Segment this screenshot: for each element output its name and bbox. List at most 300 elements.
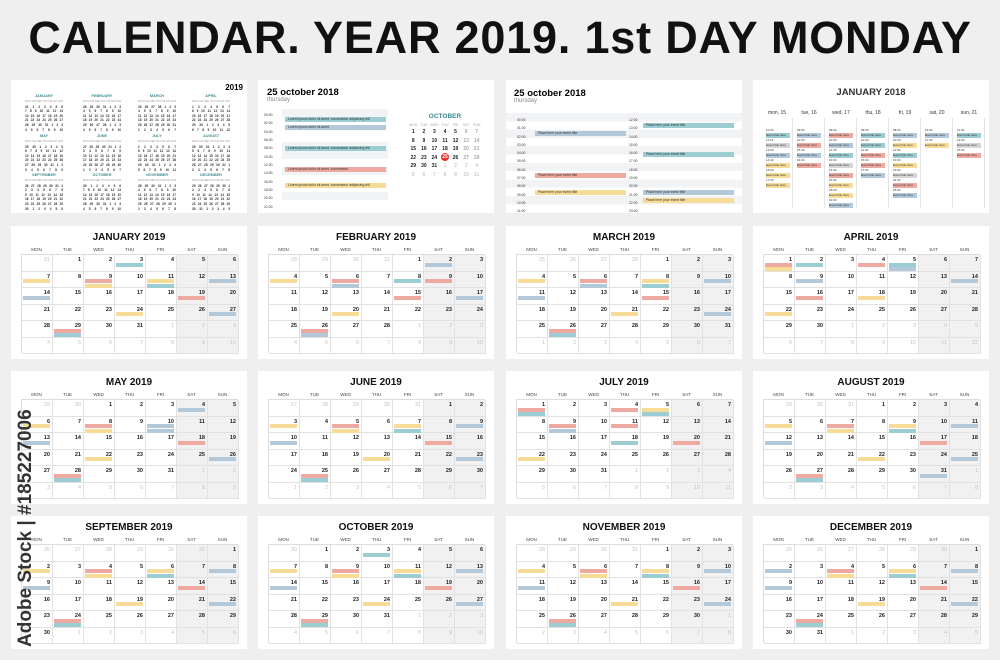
panel: june 2019: 31 [415, 402, 421, 408]
panel: december 2019: 16 [786, 596, 792, 602]
panel: may 2019: THU [125, 392, 134, 397]
panel: may 2019: 1 [202, 468, 205, 474]
panel: november 2019: 28 [632, 613, 638, 619]
panel: june 2019: 12 [353, 435, 359, 441]
panel: november 2019: 6 [666, 630, 669, 636]
panel: october 2019: SUN [465, 537, 474, 542]
mini month: october: 3 [433, 129, 436, 135]
panel: january 2019: 8 [78, 274, 81, 280]
panel: may 2019: SUN [218, 392, 227, 397]
mini: january: 31 1 2 3 4 5 6 [25, 105, 63, 109]
panel: september 2019: FRI [157, 537, 164, 542]
panel: may 2019: 20 [44, 452, 50, 458]
panel: june 2019: FRI [404, 392, 411, 397]
panel: december 2019: SAT [929, 537, 938, 542]
panel: october 2019: 20 [477, 580, 483, 586]
mini month: october: 2 [422, 129, 425, 135]
panel: september 2019: 5 [202, 630, 205, 636]
panel: may 2019: 14 [75, 435, 81, 441]
panel: may 2019: 11 [199, 418, 205, 424]
mini month: october: 30 [421, 163, 427, 169]
panel: june 2019: 26 [353, 468, 359, 474]
schedule list: 08:00 [264, 146, 272, 150]
mini: may: 20 21 22 23 24 25 26 [25, 158, 63, 162]
panel: november 2019: 31 [632, 547, 638, 553]
panel: january 2019: 2 [202, 323, 205, 329]
panel: august 2019: 29 [879, 468, 885, 474]
panel: october 2019: 26 [446, 596, 452, 602]
panel: august 2019: 3 [944, 402, 947, 408]
panel: september 2019: 2 [109, 630, 112, 636]
panel: september 2019: 30 [168, 547, 174, 553]
panel: february 2019: 11 [291, 290, 297, 296]
mini: june: MON TUE WED THU FRI SAT SUN [83, 140, 121, 143]
panel: november 2019: 9 [697, 564, 700, 570]
panel: september 2019: 30 [44, 630, 50, 636]
mini: march: 11 12 13 14 15 16 17 [138, 114, 176, 118]
mini: april: 22 23 24 25 26 27 28 [192, 118, 230, 122]
panel: september 2019: 26 [44, 547, 50, 553]
panel: january 2019: 7 [47, 274, 50, 280]
mini month: october: 15 [410, 146, 416, 152]
schedule grid: 01:00 [517, 126, 526, 130]
panel: january 2019: SUN [218, 247, 227, 252]
mini: august: 29 30 31 1 2 3 4 [192, 145, 230, 149]
panel: october 2019: THU [372, 537, 381, 542]
panel: may 2019: 30 [75, 402, 81, 408]
panel: may 2019: SAT [187, 392, 196, 397]
panel: november 2019: 10 [725, 564, 731, 570]
panel: october 2019: 9 [356, 564, 359, 570]
panel: march 2019: 3 [728, 257, 731, 263]
panel: march 2019: 26 [570, 257, 576, 263]
panel: february 2019: THU [372, 247, 381, 252]
panel: february 2019: 7 [387, 274, 390, 280]
panel: january 2019: FRI [157, 247, 164, 252]
panel: january 2019: 31 [137, 323, 143, 329]
panel: march 2019: 21 [632, 306, 638, 312]
panel: may 2019: 3 [171, 402, 174, 408]
panel: october 2019: 24 [384, 596, 390, 602]
panel: january 2019: 1 [78, 257, 81, 263]
panel: june 2019: 2 [325, 484, 328, 490]
panel: july 2019: 28 [725, 452, 731, 458]
panel: april 2019: 22 [786, 306, 792, 312]
panel: february 2019: 21 [384, 306, 390, 312]
panel: december 2019: 23 [786, 613, 792, 619]
mini: may: MAY [40, 134, 48, 138]
panel: august 2019: 23 [910, 452, 916, 458]
panel: may 2019: 17 [168, 435, 174, 441]
mini: february: 11 12 13 14 15 16 17 [83, 114, 121, 118]
panel: september 2019: 22 [230, 596, 236, 602]
mini: june: 17 18 19 20 21 22 23 [83, 158, 121, 162]
mini: december: DECEMBER [200, 173, 222, 177]
schedule list: Lorem ipsum dolor sit amet [288, 125, 329, 129]
panel: september 2019: 11 [106, 580, 112, 586]
panel: august 2019: 10 [941, 418, 947, 424]
panel: august 2019: 6 [913, 484, 916, 490]
panel: april 2019: 9 [820, 274, 823, 280]
panel: may 2019: 8 [109, 418, 112, 424]
panel: february 2019: 24 [477, 306, 483, 312]
mini month: october: 11 [442, 138, 448, 144]
panel: august 2019: 1 [882, 402, 885, 408]
panel: may 2019: 25 [199, 452, 205, 458]
panel: september 2019: 17 [75, 596, 81, 602]
week columns with events [761, 118, 985, 208]
schedule grid: 22:00 [629, 201, 638, 205]
panel: june 2019: SAT [434, 392, 443, 397]
panel: march 2019: 1 [666, 257, 669, 263]
week columns with events: Event title here [893, 193, 913, 197]
schedule list: Lorem ipsum dolor sit amet, consectetur adipiscing elit [288, 183, 370, 187]
panel: november 2019: 5 [573, 564, 576, 570]
panel: may 2019: 9 [140, 418, 143, 424]
week columns with events: Event title here [766, 183, 786, 187]
panel: november 2019: 1 [728, 613, 731, 619]
panel: august 2019: SAT [929, 392, 938, 397]
panel: july 2019: 23 [570, 452, 576, 458]
panel: february 2019: TUE [310, 247, 319, 252]
panel: april 2019: FRI [899, 247, 906, 252]
panel: august 2019: 22 [879, 452, 885, 458]
panel: august 2019: 19 [786, 452, 792, 458]
panel: february 2019: 27 [353, 323, 359, 329]
mini: october: 4 5 6 7 8 9 10 [83, 207, 121, 211]
panel: april 2019: 15 [786, 290, 792, 296]
panel: november 2019: 26 [570, 613, 576, 619]
panel: march 2019: 13 [601, 290, 607, 296]
mini month: october: SAT [463, 123, 469, 127]
panel: february 2019: 13 [353, 290, 359, 296]
mini: january [25, 94, 63, 132]
panel: october 2019: 29 [322, 613, 328, 619]
panel: june 2019 [258, 371, 494, 504]
mini: october: 14 15 16 17 18 19 20 [83, 193, 121, 197]
panel: july 2019: 19 [663, 435, 669, 441]
mini: october [83, 173, 121, 211]
week columns with events: Event title here [861, 143, 881, 147]
schedule grid: 16:00 [629, 151, 638, 155]
panel: april 2019: 7 [975, 257, 978, 263]
panel: april 2019: 4 [882, 257, 885, 263]
panel: june 2019: 7 [418, 418, 421, 424]
panel: october 2019: 30 [353, 613, 359, 619]
schedule grid: 08:00 [517, 184, 526, 188]
week columns with events: Event title here [797, 143, 817, 147]
panel: february 2019: 4 [294, 274, 297, 280]
panel: april 2019: 10 [848, 274, 854, 280]
panel: february 2019: 26 [322, 323, 328, 329]
panel: november 2019: 14 [632, 580, 638, 586]
panel: june 2019: 1 [294, 484, 297, 490]
panel: january 2019: 8 [171, 340, 174, 346]
panel: july 2019: 20 [694, 435, 700, 441]
week columns with events: Event title here [766, 173, 786, 177]
panel: april 2019: 3 [913, 323, 916, 329]
heading: 25 october 2018 [267, 87, 339, 98]
mini: november: 28 29 30 31 1 2 3 [138, 184, 176, 188]
panel: september 2019: 16 [44, 596, 50, 602]
panel: june 2019: 1 [449, 402, 452, 408]
panel: november 2019: THU [620, 537, 629, 542]
panel: april 2019: 11 [879, 274, 885, 280]
mini: october: 28 29 30 31 1 2 3 [83, 202, 121, 206]
mini: december: 9 10 11 12 13 14 15 [192, 193, 230, 197]
panel: october 2019: 31 [384, 613, 390, 619]
panel: february 2019: FRI [404, 247, 411, 252]
panel: july 2019: 24 [601, 452, 607, 458]
panel: august 2019: 20 [817, 452, 823, 458]
panel: february 2019: 9 [449, 340, 452, 346]
mini: september: SEPTEMBER [32, 173, 56, 177]
schedule list: 10:00 [264, 155, 272, 159]
schedule grid: 03:00 [517, 143, 526, 147]
panel: april 2019: 26 [910, 306, 916, 312]
mini month: october: 7 [475, 129, 478, 135]
panel: july 2019: JULY 2019 [599, 377, 649, 388]
week columns with events: Event title here [893, 163, 913, 167]
panel: october 2019: 17 [384, 580, 390, 586]
panel: march 2019: 28 [632, 257, 638, 263]
panel: june 2019: 5 [418, 484, 421, 490]
panel: march 2019: 27 [601, 323, 607, 329]
panel: june 2019: 21 [415, 452, 421, 458]
week day headers: thu, 18 [865, 110, 881, 116]
week day headers: fri, 19 [899, 110, 911, 116]
mini: october: 7 8 9 10 11 12 13 [83, 188, 121, 192]
panel: november 2019: 12 [570, 580, 576, 586]
panel: october 2019: 2 [449, 613, 452, 619]
panel: december 2019: 7 [944, 564, 947, 570]
panel: june 2019: 30 [477, 468, 483, 474]
panel: october 2019: 7 [387, 630, 390, 636]
panel: september 2019: 1 [78, 630, 81, 636]
panel: april 2019: 25 [879, 306, 885, 312]
panel: january 2019: 24 [137, 306, 143, 312]
panel: august 2019: 21 [848, 452, 854, 458]
panel: april 2019: 1 [851, 323, 854, 329]
panel: december 2019: 9 [789, 580, 792, 586]
panel: april 2019: 5 [913, 257, 916, 263]
panel: april 2019: SAT [929, 247, 938, 252]
schedule list [264, 109, 388, 209]
panel: august 2019: 4 [851, 484, 854, 490]
panel: april 2019: 28 [972, 306, 978, 312]
panel: july 2019: 1 [635, 468, 638, 474]
mini month: october: 1 [412, 129, 415, 135]
panel: daily planner 24h [506, 80, 742, 213]
panel: july 2019: 5 [666, 402, 669, 408]
panel: november 2019: 23 [694, 596, 700, 602]
panel: march 2019: 11 [539, 290, 545, 296]
mini: april: 8 9 10 11 12 13 14 [192, 109, 230, 113]
panel: may 2019: 4 [78, 484, 81, 490]
heading: JANUARY 2018 [836, 87, 906, 98]
panel: october 2019: 10 [384, 564, 390, 570]
panel: may 2019: 8 [202, 484, 205, 490]
panel: july 2019: 7 [728, 402, 731, 408]
panel: march 2019: 7 [635, 274, 638, 280]
panel: august 2019: 27 [817, 468, 823, 474]
week columns with events: Event title here [829, 173, 849, 177]
panel: february 2019: 3 [480, 323, 483, 329]
week columns with events: Event title here [797, 163, 817, 167]
panel: december 2019: SUN [960, 537, 969, 542]
mini month: october: 10 [432, 138, 437, 144]
panel: april 2019: 9 [882, 340, 885, 346]
panel: may 2019: 31 [168, 468, 174, 474]
panel: november 2019: 2 [542, 630, 545, 636]
mini: december: 2 3 4 5 6 7 8 [192, 188, 230, 192]
mini: june: 27 28 29 30 31 1 2 [83, 145, 121, 149]
panel: september 2019: 12 [137, 580, 143, 586]
panel: may 2019: 2 [233, 468, 236, 474]
mini: may: 27 28 29 30 31 1 2 [25, 163, 63, 167]
panel: march 2019: 19 [570, 306, 576, 312]
panel: june 2019: 8 [449, 418, 452, 424]
schedule grid: Place here your event title [646, 198, 685, 202]
panel: may 2019: WED [93, 392, 104, 397]
panel: september 2019: 8 [233, 564, 236, 570]
mini: march: MON TUE WED THU FRI SAT SUN [138, 100, 176, 103]
panel: september 2019: 21 [199, 596, 205, 602]
panel: march 2019: MON [526, 247, 537, 252]
panel: august 2019: 8 [882, 418, 885, 424]
panel: february 2019: FEBRUARY 2019 [336, 232, 416, 243]
panel: january 2019: 18 [168, 290, 174, 296]
mini: january: 28 29 30 31 1 2 3 [25, 123, 63, 127]
mini month: october [409, 113, 480, 178]
panel: april 2019: 20 [941, 290, 947, 296]
panel: february 2019: 10 [477, 340, 483, 346]
panel: september 2019: 4 [109, 564, 112, 570]
panel: september 2019: 28 [106, 547, 112, 553]
panel: february 2019 [258, 226, 494, 359]
panel: april 2019: 7 [820, 340, 823, 346]
panel: january 2019: 31 [44, 257, 50, 263]
panel: september 2019: 26 [137, 613, 143, 619]
panel: december 2019: 26 [879, 613, 885, 619]
mini: february: MON TUE WED THU FRI SAT SUN [83, 100, 121, 103]
mini: october: 21 22 23 24 25 26 27 [83, 197, 121, 201]
panel: june 2019: 29 [446, 468, 452, 474]
panel: july 2019: TUE [558, 392, 567, 397]
panel: november 2019: FRI [652, 537, 659, 542]
panel: october 2019: 4 [294, 630, 297, 636]
schedule grid: Place here your event title [538, 173, 577, 177]
schedule list: 12:00 [264, 163, 272, 167]
panel: april 2019: APRIL 2019 [844, 232, 898, 243]
panel: march 2019: 4 [542, 274, 545, 280]
mini: may [25, 134, 63, 172]
schedule list: 20:00 [264, 196, 272, 200]
panel: january 2019: 5 [202, 257, 205, 263]
panel: october 2019: 25 [415, 596, 421, 602]
panel: december 2019: 12 [879, 580, 885, 586]
panel: december 2019: 1 [851, 630, 854, 636]
panel: december 2019: 3 [913, 630, 916, 636]
panel: august 2019: TUE [805, 392, 814, 397]
panel: august 2019: 3 [820, 484, 823, 490]
panel: july 2019: 10 [694, 484, 700, 490]
mini: june: 10 11 12 13 14 15 16 [83, 154, 121, 158]
panel: december 2019: 13 [910, 580, 916, 586]
panel: may 2019: 23 [137, 452, 143, 458]
panel: october 2019: 14 [291, 580, 297, 586]
panel: june 2019: WED [340, 392, 351, 397]
panel: january 2019: 11 [168, 274, 174, 280]
panel: november 2019: 28 [539, 547, 545, 553]
panel: december 2019: 26 [817, 547, 823, 553]
panel: april 2019: 12 [910, 274, 916, 280]
panel: september 2019: 28 [199, 613, 205, 619]
mini: june [83, 134, 121, 172]
panel: september 2019: SAT [187, 537, 196, 542]
panel: april 2019: 6 [789, 340, 792, 346]
mini: november [138, 173, 176, 211]
title: CALENDAR. YEAR 2019. 1st DAY MONDAY [28, 12, 972, 63]
panel: november 2019: 25 [539, 613, 545, 619]
panel: june 2019: THU [372, 392, 381, 397]
panel: august 2019: 5 [882, 484, 885, 490]
panel: may 2019: 5 [233, 402, 236, 408]
panel: september 2019: 13 [168, 580, 174, 586]
panel: march 2019: 22 [663, 306, 669, 312]
panel: june 2019: 28 [322, 402, 328, 408]
panel: june 2019: 28 [415, 468, 421, 474]
mini: july: 15 16 17 18 19 20 21 [138, 154, 176, 158]
panel: january 2019: 29 [75, 323, 81, 329]
panel: october 2019: 10 [477, 630, 483, 636]
panel: march 2019: WED [588, 247, 599, 252]
panel: december 2019: 25 [786, 547, 792, 553]
panel: october 2019: 18 [415, 580, 421, 586]
panel: february 2019: 5 [325, 340, 328, 346]
panel: february 2019: 22 [415, 306, 421, 312]
panel: may 2019: MAY 2019 [106, 377, 152, 388]
panel: november 2019: 7 [635, 564, 638, 570]
mini month: october: 24 [432, 155, 437, 161]
panel: february 2019: 16 [446, 290, 452, 296]
panel: august 2019: 18 [972, 435, 978, 441]
panel: december 2019 [753, 516, 989, 649]
panel: july 2019: 16 [570, 435, 576, 441]
schedule list: Lorem ipsum dolor sit amet, consectetur adipiscing elit [288, 117, 370, 121]
panel: march 2019: 15 [663, 290, 669, 296]
panel: june 2019: 22 [446, 452, 452, 458]
panel: december 2019: 17 [817, 596, 823, 602]
panel: july 2019: 2 [573, 402, 576, 408]
panel: march 2019: 23 [694, 306, 700, 312]
mini: june: 1 2 3 4 5 6 7 [83, 168, 121, 172]
panel: december 2019: 3 [820, 564, 823, 570]
panel: october 2019: 22 [322, 596, 328, 602]
panel: june 2019: JUNE 2019 [350, 377, 402, 388]
panel: october 2019: MON [278, 537, 289, 542]
mini month: october: 5 [412, 172, 415, 178]
mini month: october: 16 [421, 146, 427, 152]
panel: march 2019: THU [620, 247, 629, 252]
mini: february: 25 26 27 28 1 2 3 [83, 123, 121, 127]
panel: march 2019: 4 [635, 340, 638, 346]
panel: may 2019: 3 [47, 484, 50, 490]
panel: december 2019: 27 [848, 547, 854, 553]
panel: february 2019: 28 [384, 323, 390, 329]
panel: november 2019: 7 [697, 630, 700, 636]
panel: july 2019: 18 [632, 435, 638, 441]
